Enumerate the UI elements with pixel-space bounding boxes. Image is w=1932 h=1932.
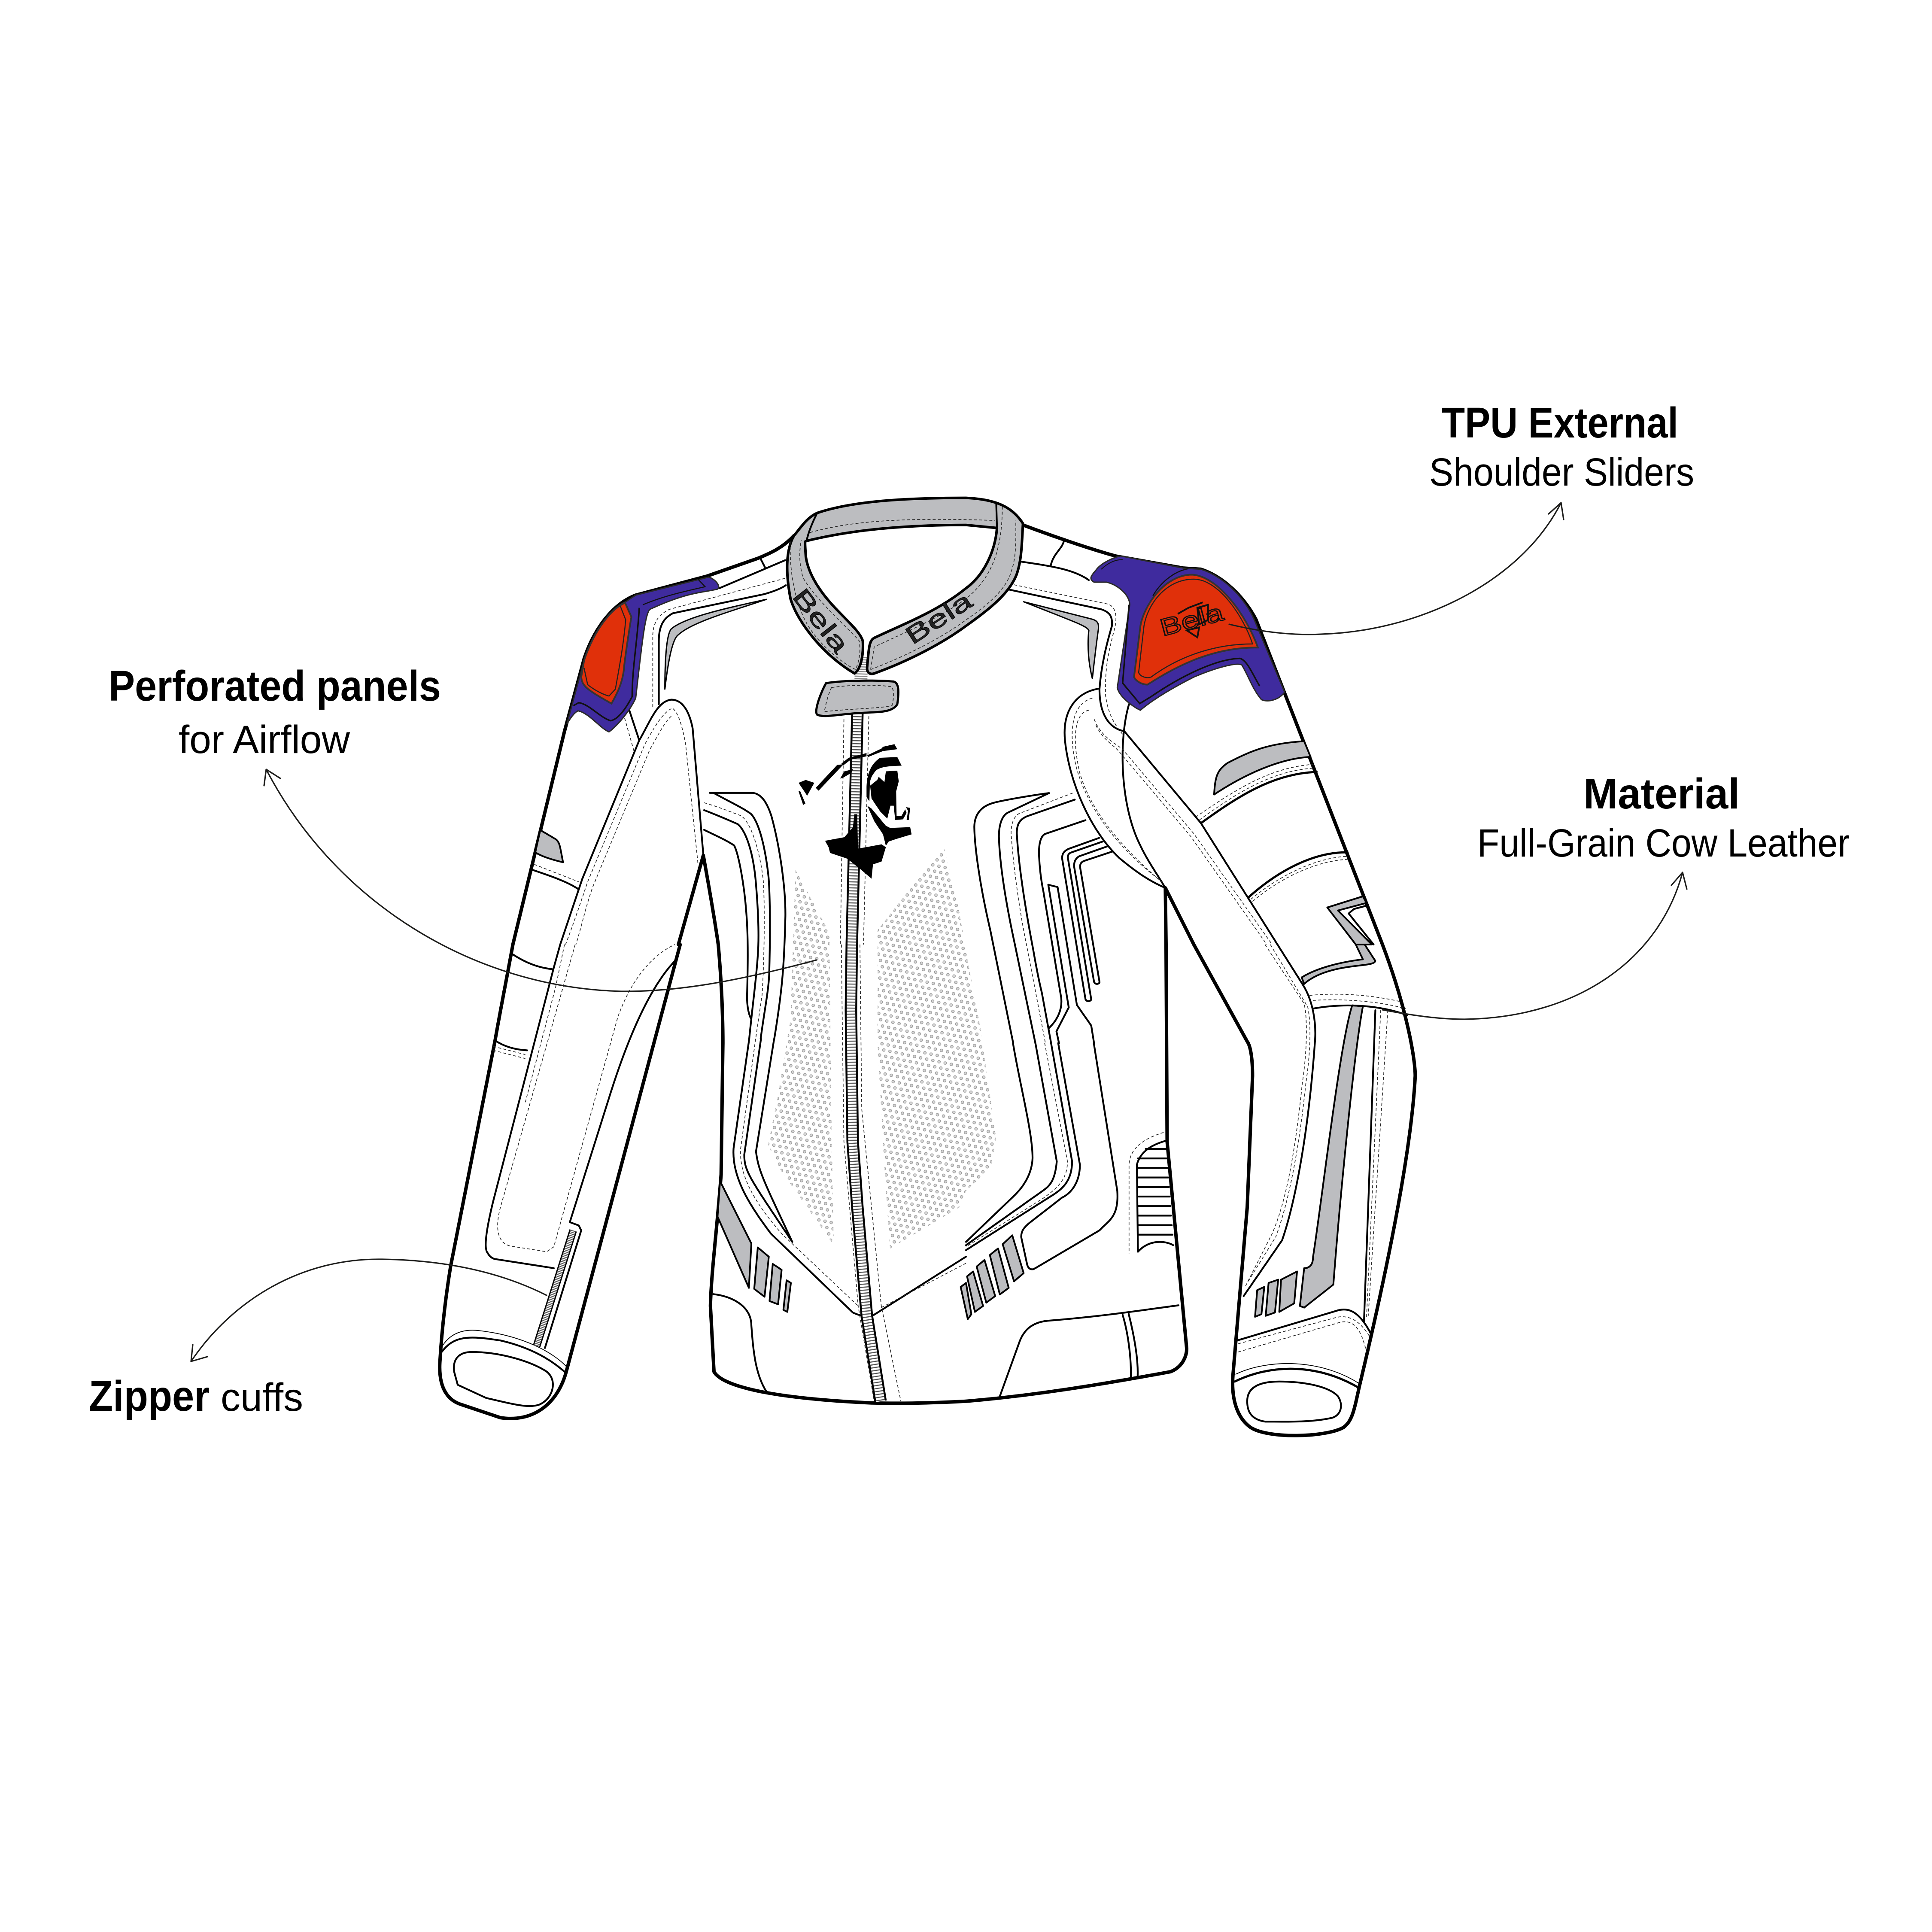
collar logo right: Bela — [900, 586, 978, 650]
label: TPU External — [1429, 399, 1694, 494]
right shoulder slider — [1091, 556, 1285, 710]
label: TPU External: TPU External — [1442, 399, 1678, 447]
perforated panel left — [768, 870, 834, 1245]
perforated panel right — [878, 847, 996, 1249]
label: Perforated panels — [109, 662, 441, 762]
left chest seam lines — [704, 793, 785, 1039]
label: Material — [1477, 770, 1850, 865]
bear logo on chest — [799, 744, 911, 879]
lower left jacket lines — [440, 945, 966, 1419]
sleeve zipper — [537, 1230, 573, 1346]
label: Perforated panels: Perforated panels — [109, 662, 441, 710]
collar tab — [816, 680, 898, 716]
jacket illustration — [440, 498, 1415, 1436]
upper right jacket lines — [1007, 525, 1382, 945]
slider logo: Bela — [1157, 598, 1227, 641]
leader: material — [1382, 872, 1687, 1019]
label: Perforated panels: for Airflow — [179, 718, 350, 762]
label: Material: Material — [1583, 770, 1740, 818]
collar — [787, 498, 1023, 716]
left shoulder slider — [567, 577, 719, 732]
lower right jacket lines — [961, 945, 1415, 1436]
label: TPU External: Shoulder Sliders — [1429, 450, 1694, 494]
right chest seam lines — [974, 793, 1113, 1043]
upper left jacket lines — [513, 535, 869, 945]
leader: zipper cuffs — [191, 1259, 547, 1361]
centre front zipper — [851, 657, 881, 1401]
leader: perforated panels — [264, 769, 817, 991]
label: Zipper cuffs: cuffs — [221, 1376, 303, 1419]
collar logo left: Bela — [787, 583, 855, 659]
label: Material: Full-Grain Cow Leather — [1477, 821, 1850, 865]
label: Zipper cuffs — [89, 1372, 303, 1420]
label: Zipper cuffs: Zipper — [89, 1372, 210, 1420]
small bear on slider — [1178, 602, 1208, 637]
leader: shoulder sliders — [1229, 503, 1564, 635]
